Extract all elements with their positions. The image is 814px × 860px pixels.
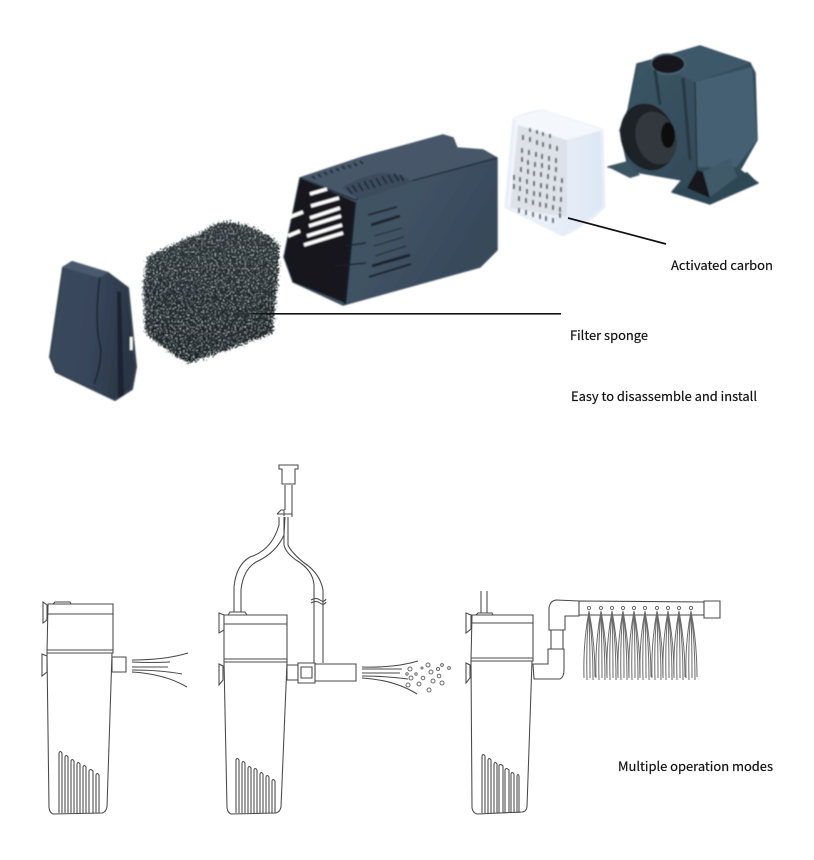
lower elbow xyxy=(533,649,564,679)
leader line: activated carbon xyxy=(568,218,666,244)
water streams xyxy=(132,653,188,687)
air tubes xyxy=(234,517,323,663)
label: activated carbon: Activated carbon xyxy=(671,255,773,274)
icon: filter cage xyxy=(284,135,497,305)
label: multiple operation modes: Multiple operation modes xyxy=(618,756,773,775)
connector pipe xyxy=(551,630,563,649)
spray bar xyxy=(579,601,704,615)
icon: end cap xyxy=(50,261,136,400)
label: filter sponge: Filter sponge xyxy=(570,325,648,344)
diagram: basic filter with water outlet xyxy=(42,602,188,814)
icon: filter sponge xyxy=(143,222,279,363)
water curtain xyxy=(584,606,697,680)
leader line: filter sponge xyxy=(226,313,561,315)
air and water stream xyxy=(362,661,418,694)
icon: water pump xyxy=(608,46,758,204)
upper elbow xyxy=(549,600,579,630)
diagram: filter with spray bar xyxy=(466,591,720,814)
air bubbles xyxy=(406,663,450,692)
diagram: filter with air venturi tube xyxy=(219,465,450,814)
label: easy to disassemble and install: Easy to disassemble and install xyxy=(571,386,757,405)
air valve xyxy=(279,465,298,484)
icon: activated carbon cartridge xyxy=(506,110,604,235)
